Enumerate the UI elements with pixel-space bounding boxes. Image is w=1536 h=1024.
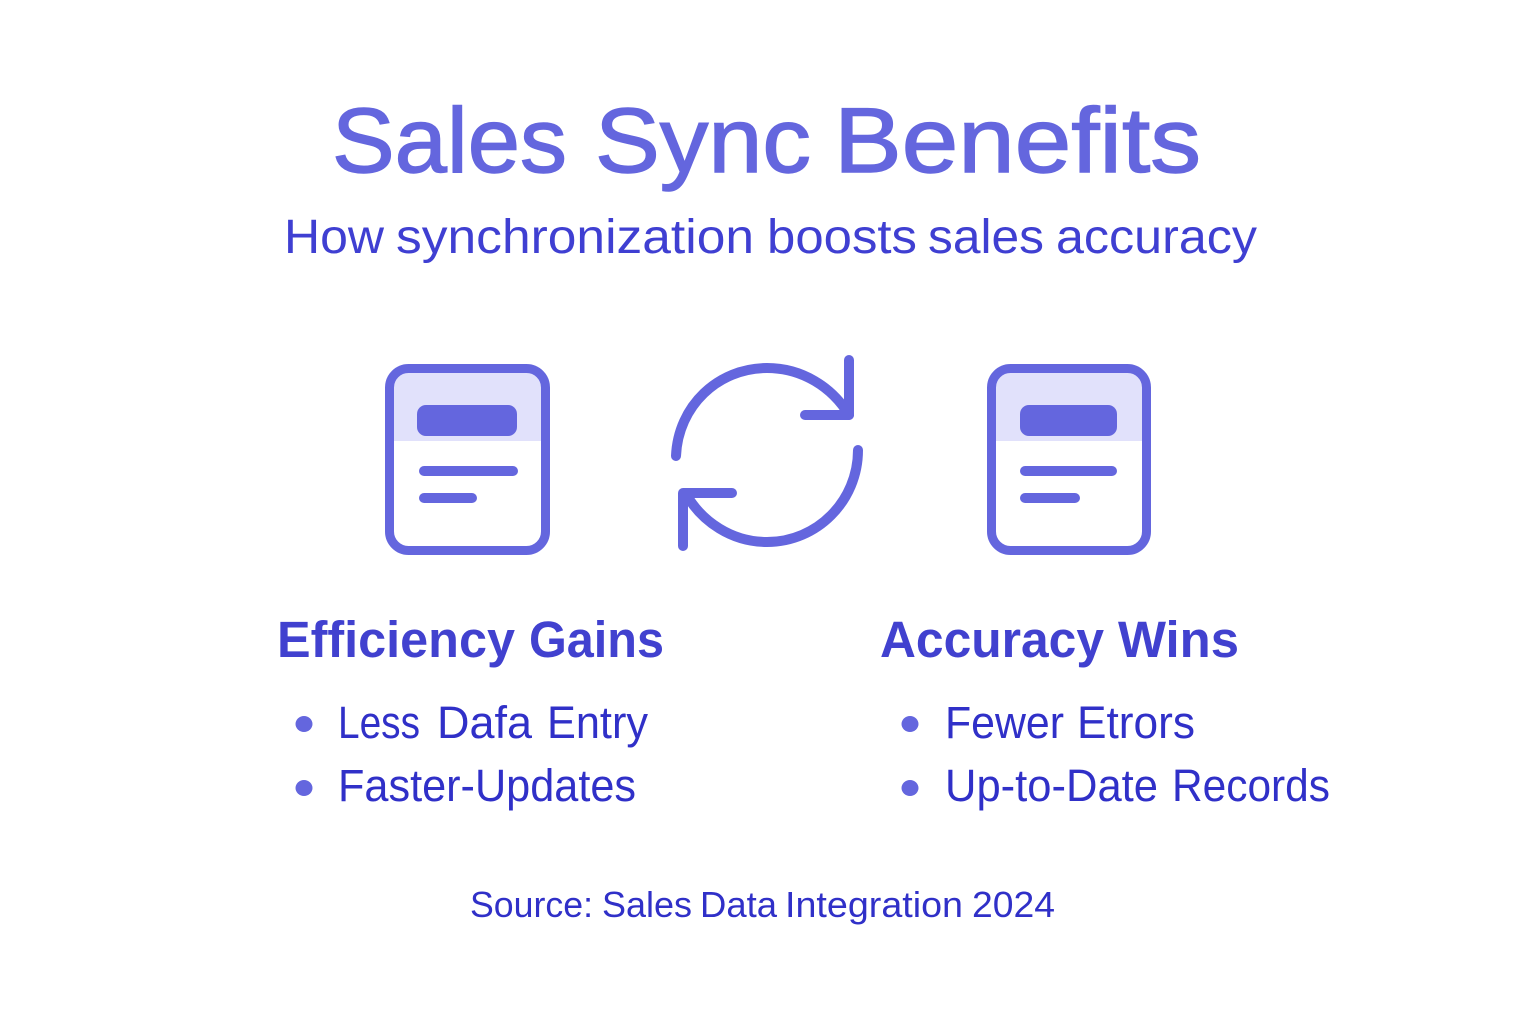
title bbox=[332, 90, 1201, 192]
source note: Integration bbox=[785, 884, 963, 925]
bullet: fewer errors bbox=[902, 697, 1195, 748]
subtitle: accuracy bbox=[1056, 211, 1257, 264]
title: Benefits bbox=[834, 90, 1201, 192]
bullet: less data entry: Less bbox=[338, 697, 420, 748]
subtitle: synchronization bbox=[396, 211, 754, 264]
icon: right document bbox=[992, 368, 1146, 550]
bullet: less data entry: Entry bbox=[547, 697, 648, 748]
bullet: fewer errors: Fewer bbox=[945, 697, 1064, 748]
bullet: fewer errors: Etrors bbox=[1077, 697, 1195, 748]
subtitle bbox=[284, 211, 1257, 264]
source note: Sales bbox=[602, 884, 692, 925]
subtitle: boosts bbox=[767, 211, 917, 264]
bullet: less data entry: Dafa bbox=[437, 697, 533, 748]
bullet: faster updates: Faster-Updates bbox=[338, 760, 636, 811]
source note: Data bbox=[700, 884, 778, 925]
bullet: up-to-date records: Records bbox=[1172, 760, 1330, 811]
source note: 2024 bbox=[972, 884, 1055, 925]
bullet: less data entry bbox=[296, 697, 648, 748]
bullet: up-to-date records bbox=[902, 760, 1330, 811]
heading: efficiency gains: Gains bbox=[529, 611, 664, 668]
bullet: up-to-date records: Up-to-Date bbox=[945, 760, 1158, 811]
title: Sales bbox=[332, 90, 567, 192]
source note bbox=[470, 884, 1055, 925]
panel: accuracy wins bbox=[880, 611, 1330, 811]
title: Sync bbox=[595, 90, 811, 192]
icon: sync arrows bbox=[676, 360, 858, 546]
icon: left document bbox=[390, 368, 546, 550]
panel: efficiency gains bbox=[277, 611, 664, 811]
subtitle: sales bbox=[928, 211, 1044, 264]
heading: efficiency gains: Efficiency bbox=[277, 611, 516, 668]
subtitle: How bbox=[284, 211, 384, 264]
heading: accuracy wins bbox=[880, 611, 1239, 668]
heading: efficiency gains bbox=[277, 611, 664, 668]
heading: accuracy wins: Accuracy bbox=[880, 611, 1105, 668]
source note: Source: bbox=[470, 884, 593, 925]
heading: accuracy wins: Wins bbox=[1118, 611, 1239, 668]
